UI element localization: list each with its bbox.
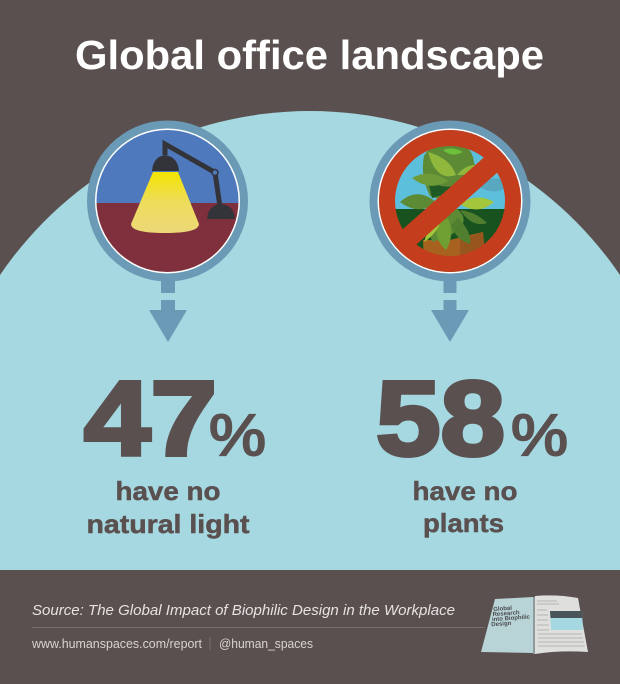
stat: 58% [376,360,568,478]
stat: 47%: % [209,403,266,468]
label: have no natural light: have no [116,476,220,506]
lamp arm and bases [152,144,235,219]
stat: 58%: 58 [376,360,505,478]
lamp light beam [131,172,199,233]
label: have no plants: plants [423,508,504,538]
label: have no natural light [86,476,250,539]
title: Global office landscape [75,32,544,78]
stat: 47%: 47 [84,360,217,478]
connector arrow left [149,280,187,342]
booklet cover text: Research [492,610,520,618]
booklet cover text: into Biophilic [492,615,531,623]
booklet cover text [490,605,531,628]
report booklet [481,595,588,654]
icon: desk lamp [87,120,250,282]
label: have no natural light: natural light [86,509,250,539]
dome background [0,111,620,570]
booklet cover text: Global [493,606,512,613]
source line: Source: The Global Impact of Biophilic Design in the Workplace [32,602,455,619]
links: www.humanspaces.com/report [31,637,203,651]
booklet cover text: Design [491,621,512,628]
links [31,637,313,651]
stat: 47% [84,360,266,478]
stat: 58%: % [511,403,568,468]
label: have no plants [412,476,518,538]
connector arrow right [431,280,469,342]
leaves [400,142,510,250]
label: have no plants: have no [412,476,518,506]
prohibition sign [387,138,513,264]
links: @human_spaces [219,637,313,651]
plant pot [423,232,484,256]
icon: no plants [370,120,530,282]
